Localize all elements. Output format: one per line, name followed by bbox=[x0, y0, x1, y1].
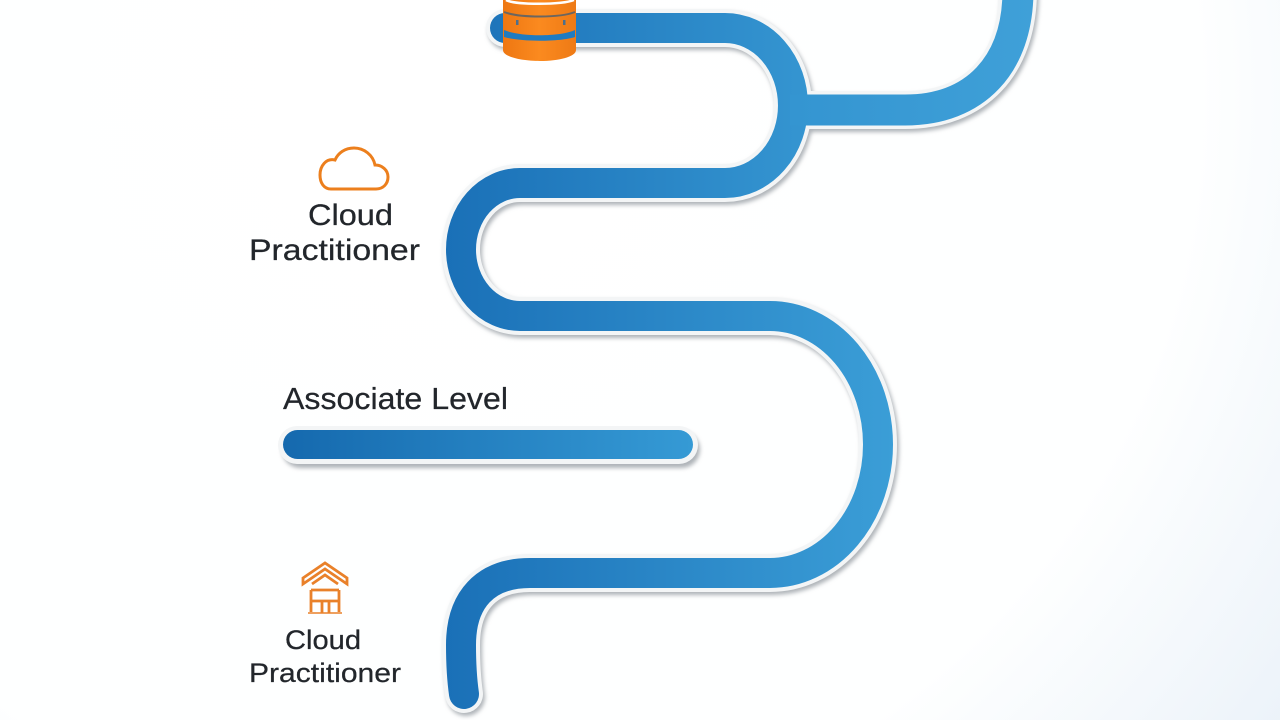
arrow: winding path with upper right branch bbox=[461, 0, 1020, 697]
text: Cloud Practitioner upper label: Practitioner bbox=[249, 234, 420, 267]
heading: Associate Level: Associate Level bbox=[283, 381, 508, 416]
text: Cloud Practitioner lower label: Cloud bbox=[285, 625, 361, 655]
text: Cloud Practitioner lower label: Practitioner bbox=[249, 658, 401, 688]
text: Cloud Practitioner upper label bbox=[249, 199, 420, 267]
icon: cloud outline bbox=[320, 148, 388, 189]
bar: associate level progress bbox=[278, 426, 700, 468]
text: Cloud Practitioner upper label: Cloud bbox=[308, 199, 393, 232]
text: Cloud Practitioner lower label bbox=[249, 625, 401, 688]
icon: orange database cylinder bbox=[503, 0, 576, 61]
icon: orange building bbox=[303, 563, 347, 613]
